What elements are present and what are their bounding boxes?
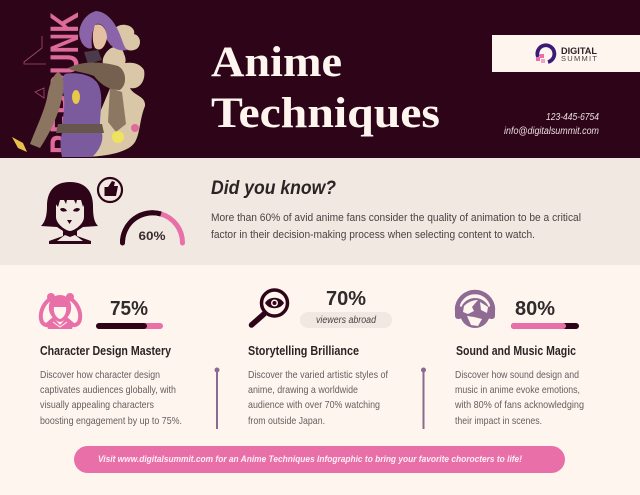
pill: viewers abroad: [300, 312, 392, 328]
contact details: info@digitalsummit.com: [504, 126, 599, 137]
title: Techniques: [211, 90, 440, 137]
progress bar: [511, 323, 579, 329]
stat: 70%: [326, 288, 366, 310]
call to action banner: Visit www.digitalsummit.com for an Anime Techniques Infographic to bring your favorite chorocters to life!: [98, 454, 522, 465]
body text: Discover how sound design and: [455, 369, 579, 381]
panel: character design: [40, 293, 182, 427]
progress bar: [96, 323, 163, 329]
smoke: [112, 25, 140, 51]
icon: anime girl: [41, 182, 98, 244]
title: [211, 39, 440, 137]
body text: More than 60% of avid anime fans consider the quality of animation to be a critical: [211, 212, 581, 224]
hair: [79, 11, 128, 50]
contact details: 123-445-6754: [546, 112, 599, 123]
divider: [421, 368, 426, 429]
arm: [30, 72, 64, 148]
title: Anime: [211, 39, 342, 86]
body text: [40, 369, 182, 427]
panel: storytelling: [248, 288, 392, 427]
icon: sailor character: [41, 293, 80, 329]
header panel: [0, 0, 640, 158]
heading: Sound and Music Magic: [456, 344, 576, 358]
body text: visually appealing characters: [40, 399, 154, 411]
contact details: [504, 112, 599, 137]
body text: factor in their decision-making process when selecting content to watch.: [211, 229, 535, 241]
body text: their impact in scenes.: [455, 415, 542, 427]
body text: music in anime evoke emotions,: [455, 384, 580, 396]
body text: anime, drawing a worldwide: [248, 384, 358, 396]
icon: magnifying eye: [252, 290, 288, 325]
body text: from outside Japan.: [248, 415, 325, 427]
stat: 75%: [110, 298, 148, 320]
icon: globe headphones: [455, 292, 495, 328]
panel: did you know: [0, 158, 640, 265]
heading: Storytelling Brilliance: [248, 344, 359, 358]
body text: Discover how character design: [40, 369, 160, 381]
logo card: [492, 35, 640, 72]
heading: did you know: Did you know?: [211, 178, 336, 199]
armour and torso: [84, 50, 102, 64]
body text: [454, 369, 584, 427]
chart: 60% gauge: 60%: [138, 229, 166, 243]
heading: Character Design Mastery: [40, 344, 171, 358]
illustration: anime character: [12, 11, 145, 157]
body text: boosting engagement by up to 75%.: [40, 415, 182, 427]
divider: [214, 368, 220, 429]
call to action banner: [74, 446, 565, 473]
body text: audience with over 70% watching: [248, 399, 380, 411]
body text: [248, 369, 388, 427]
panel: sound and music: [454, 292, 584, 427]
logo card: DIGITAL: [561, 46, 598, 56]
body text: [211, 212, 581, 241]
icon: thumbs up: [98, 178, 122, 202]
body text: captivates audiences globally, with: [40, 384, 176, 396]
stat: 80%: [515, 298, 555, 320]
chart: 60% gauge: [122, 213, 183, 243]
body text: with 80% of fans acknowledging: [454, 399, 584, 411]
logo card: SUMMIT: [561, 54, 597, 63]
pill: viewers abroad: viewers abroad: [316, 315, 376, 326]
icon: logo mark: [536, 45, 554, 63]
body text: Discover the varied artistic styles of: [248, 369, 388, 381]
